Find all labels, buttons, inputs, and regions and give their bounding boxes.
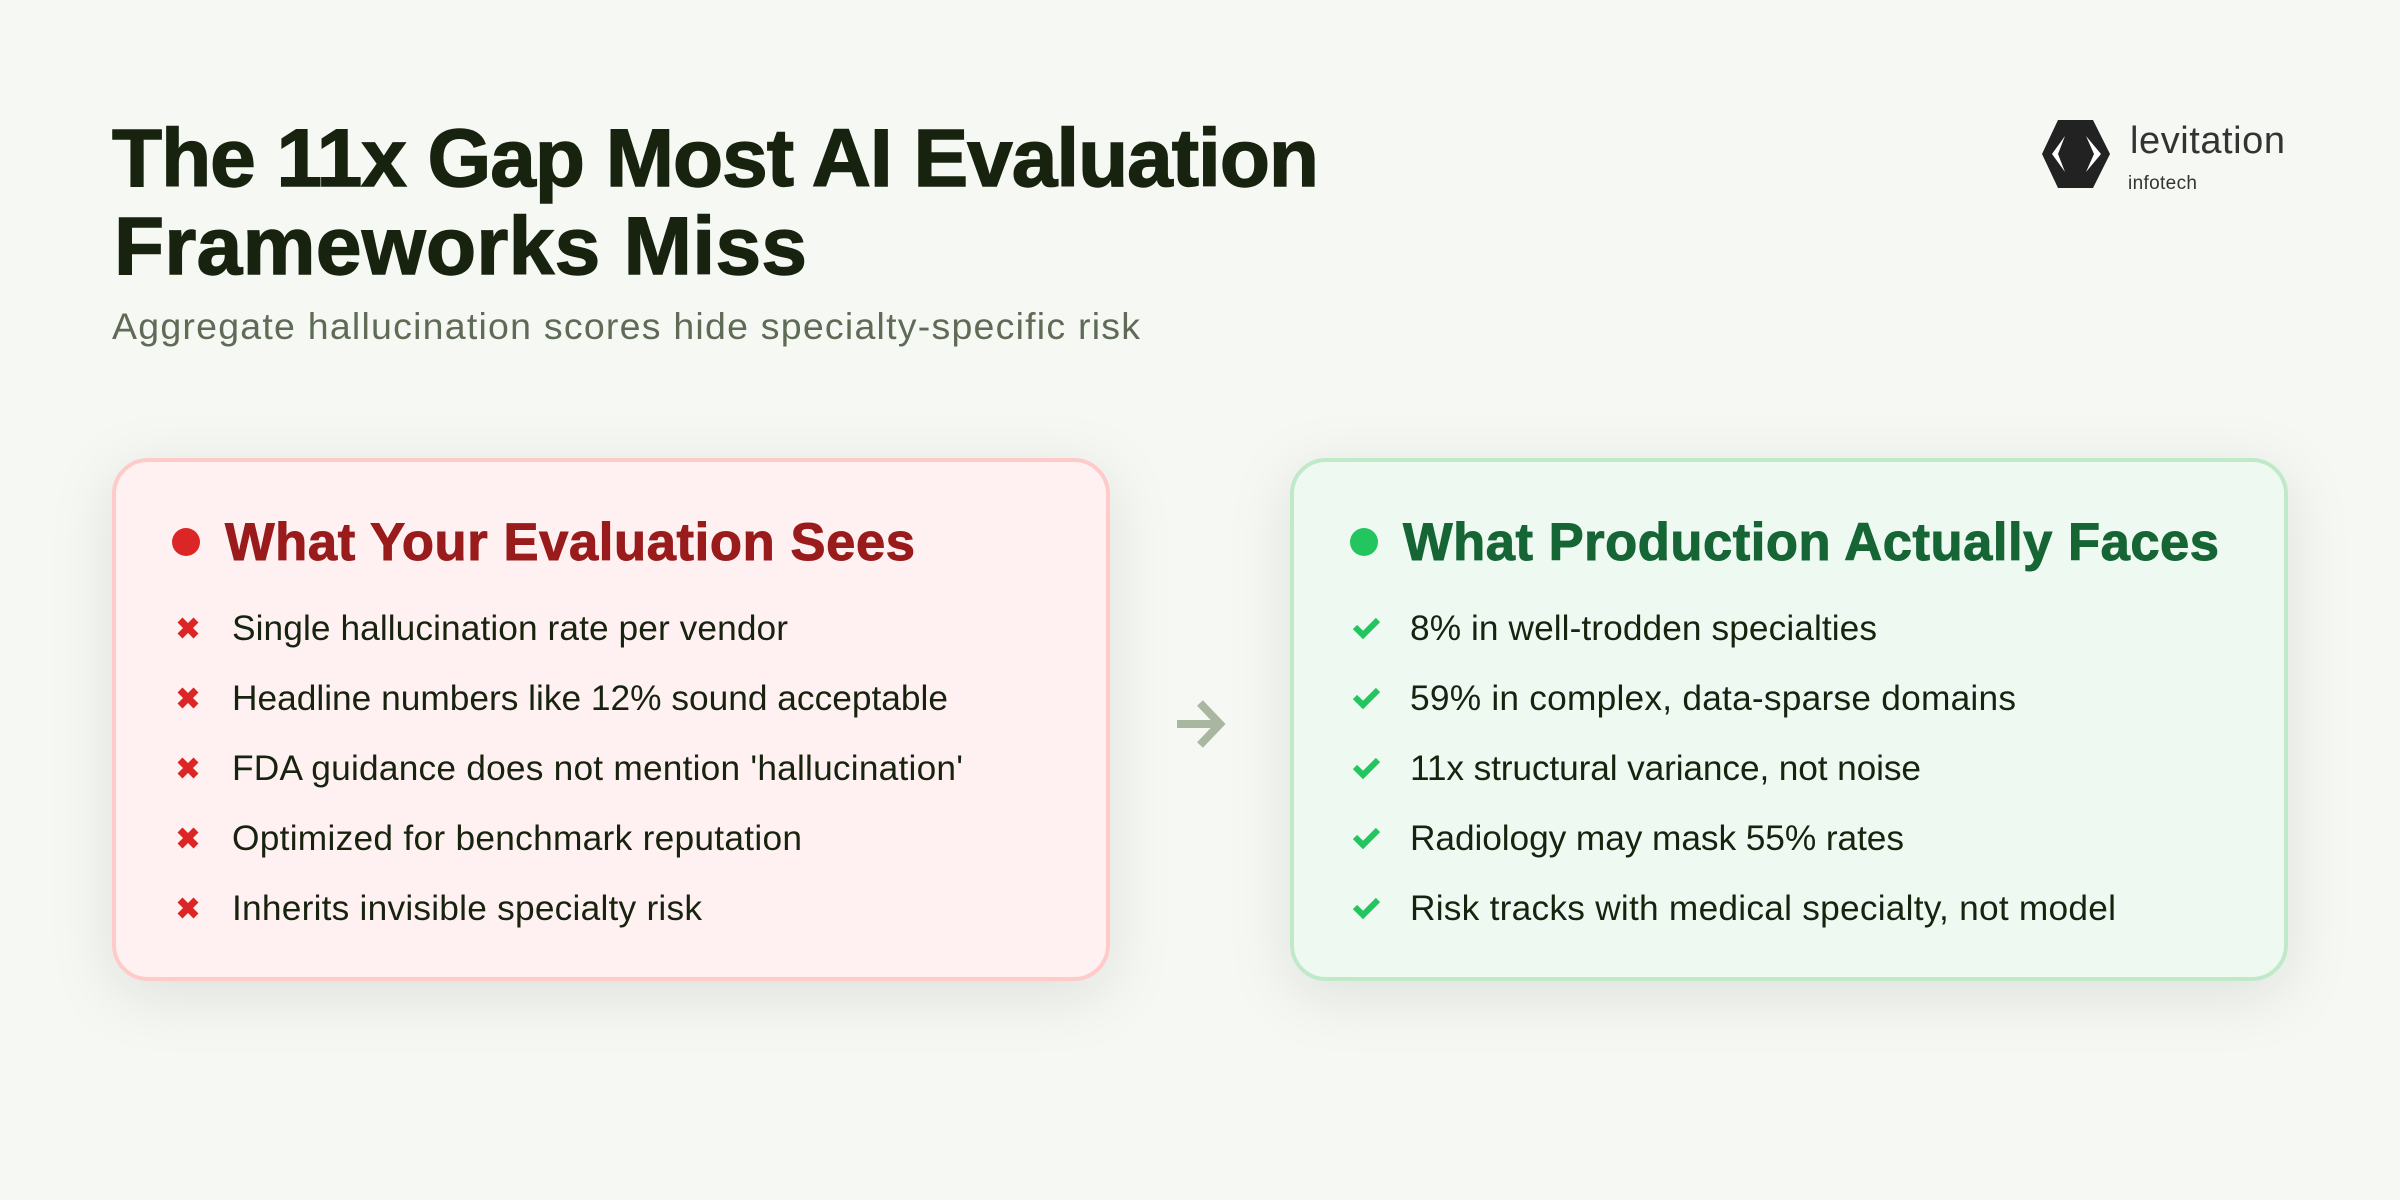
- panel background: [114, 460, 1108, 979]
- logo wordmark: levitation: [2130, 120, 2285, 162]
- list item: Risk tracks with medical specialty, not model: [1410, 889, 2116, 928]
- panel: what your evaluation sees: [114, 460, 1108, 979]
- panel: what production actually faces: [1292, 460, 2286, 979]
- list item: Inherits invisible specialty risk: [232, 889, 702, 928]
- arrow: [1177, 703, 1220, 745]
- list item: Headline numbers like 12% sound acceptable: [232, 679, 948, 718]
- title: Frameworks Miss: [114, 201, 807, 292]
- logo: levitation infotech: [2042, 120, 2285, 194]
- list item: 11x structural variance, not noise: [1410, 749, 1921, 788]
- logo wordmark: [2128, 120, 2285, 194]
- title: [112, 113, 1319, 292]
- title: The 11x Gap Most AI Evaluation: [112, 113, 1319, 204]
- list item: 8% in well-trodden specialties: [1410, 609, 1877, 648]
- panel heading: What Your Evaluation Sees: [225, 513, 915, 572]
- list item: Single hallucination rate per vendor: [232, 609, 788, 648]
- subtitle: Aggregate hallucination scores hide specialty-specific risk: [112, 305, 1140, 347]
- list item: Optimized for benchmark reputation: [232, 819, 802, 858]
- list item: Radiology may mask 55% rates: [1410, 819, 1904, 858]
- icon: hexagon logo mark: [2042, 120, 2110, 188]
- panel heading: What Production Actually Faces: [1403, 513, 2219, 572]
- list item: 59% in complex, data-sparse domains: [1410, 679, 2016, 718]
- logo wordmark: infotech: [2128, 173, 2197, 194]
- list item: FDA guidance does not mention 'hallucination': [232, 749, 963, 788]
- panel background: [1292, 460, 2286, 979]
